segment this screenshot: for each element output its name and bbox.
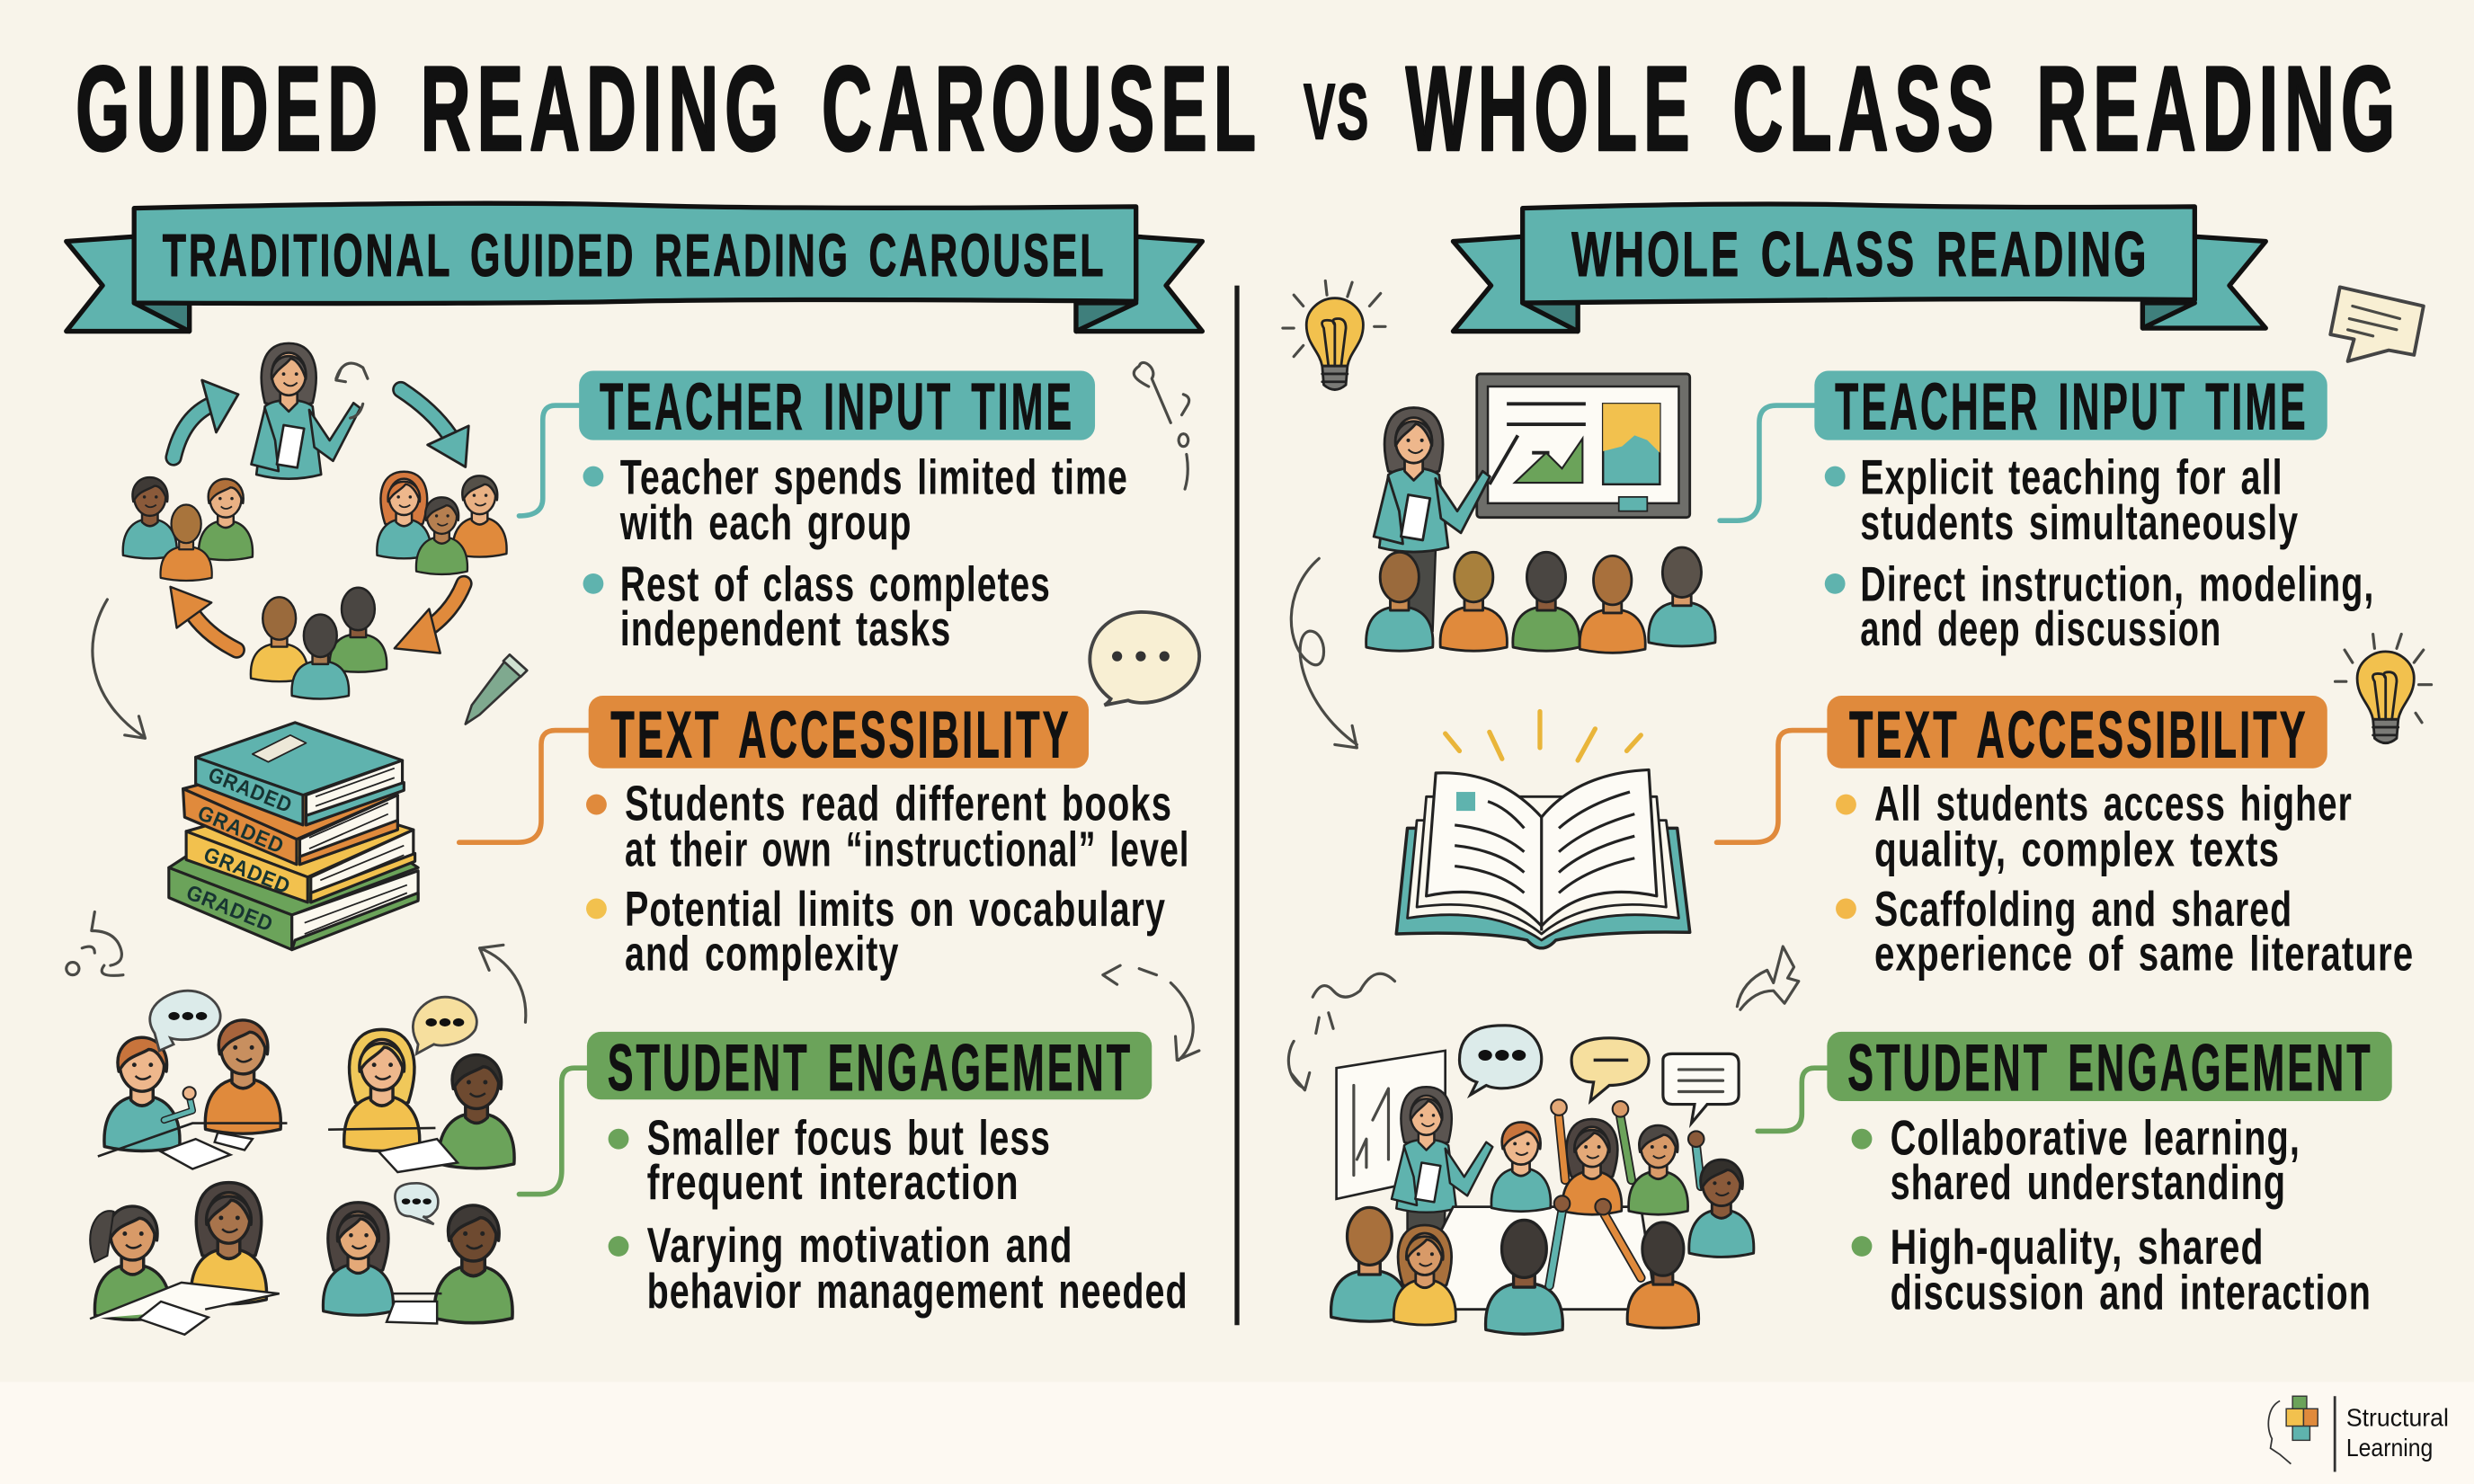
- cover: [1396, 828, 1690, 948]
- bullet list: shared understanding: [1891, 1155, 2286, 1210]
- orange book: GRADED: [194, 802, 288, 859]
- arrow: curved dashed: [1103, 965, 1199, 1060]
- left student group: [123, 477, 253, 581]
- green book: GRADED: [182, 881, 276, 937]
- pair: top left: [98, 991, 287, 1169]
- teacher: [1374, 408, 1517, 631]
- bottom student group: [251, 588, 387, 698]
- whiteboard: [1337, 1051, 1446, 1199]
- arrow: orange up-left: [171, 587, 236, 650]
- yellow book: [186, 796, 415, 902]
- section: student engagement: [1758, 1030, 2392, 1320]
- front row students: [1331, 1195, 1699, 1334]
- table: [1402, 1207, 1657, 1310]
- logo icon: [2268, 1396, 2318, 1464]
- pair: bottom left: [90, 1183, 280, 1335]
- section: teacher input time: [1720, 369, 2374, 656]
- teal book: GRADED: [205, 763, 296, 818]
- seated class seen from behind: [1366, 547, 1715, 653]
- yellow book: GRADED: [200, 843, 294, 899]
- pill heading: STUDENT ENGAGEMENT: [608, 1030, 1133, 1105]
- pair: top right: •••: [424, 1006, 466, 1038]
- title: VS: [1304, 67, 1369, 156]
- title: GUIDED READING CAROUSEL: [76, 42, 1262, 176]
- raised-hand students: [1491, 1099, 1754, 1257]
- logo divider: [2334, 1396, 2336, 1471]
- section: text accessibility: [1717, 696, 2414, 981]
- pair: bottom right: •••: [401, 1189, 432, 1213]
- orange book: [183, 760, 397, 865]
- rays: [1446, 712, 1641, 760]
- bullet list: and complexity: [625, 926, 899, 981]
- illustration: graded book stack: [169, 723, 418, 950]
- pill heading: [587, 1030, 1152, 1105]
- bullet list: Rest of class completes: [620, 557, 1051, 612]
- pages: [1408, 821, 1678, 940]
- illustration: pair work groups: [90, 991, 514, 1335]
- arrow: orange down-left: [395, 583, 464, 653]
- logo wordmark: Learning: [2346, 1434, 2433, 1462]
- banner: whole class reading: WHOLE CLASS READING: [1571, 218, 2149, 289]
- speech bubbles: •••: [1477, 1034, 1527, 1076]
- bullet list: at their own “instructional” level: [625, 822, 1189, 877]
- bullet list: independent tasks: [620, 601, 951, 656]
- icon: note speech bubble: [2330, 287, 2424, 361]
- connector: [1717, 731, 1827, 842]
- teacher: [1392, 1087, 1492, 1247]
- green book: [169, 844, 418, 950]
- bullet list: students simultaneously: [1860, 495, 2299, 550]
- connector: [1758, 1068, 1827, 1131]
- footer band: [0, 1382, 2474, 1484]
- logo wordmark: [2346, 1404, 2449, 1462]
- bullet list: with each group: [619, 495, 912, 550]
- section: student engagement: [519, 1030, 1188, 1319]
- panel: centre divider: [1234, 286, 1240, 1325]
- pill heading: TEXT ACCESSIBILITY: [610, 697, 1072, 771]
- arrow: board to book with loop: [1291, 558, 1357, 748]
- illustration: teacher rotating between groups: [123, 343, 507, 698]
- banner: whole class reading: [1453, 204, 2265, 332]
- bullet list: [1852, 1111, 2372, 1320]
- bullet list: [583, 449, 1128, 656]
- small circular arrows: [336, 363, 368, 418]
- pill heading: TEACHER INPUT TIME: [600, 369, 1074, 443]
- section: text accessibility: [459, 696, 1189, 981]
- connector: [1720, 405, 1814, 520]
- bullet list: and deep discussion: [1860, 601, 2221, 656]
- bullet list: Potential limits on vocabulary: [625, 882, 1166, 937]
- icon: light bulb small: [2336, 635, 2432, 743]
- bullet list: [586, 777, 1189, 981]
- doodle: question squiggle: [1134, 362, 1189, 489]
- bullet list: frequent interaction: [647, 1155, 1019, 1210]
- bullet list: Students read different books: [625, 777, 1172, 831]
- pair: top left: •••: [167, 1000, 209, 1032]
- bullet list: [1825, 449, 2374, 656]
- arrow: pairs to books: [480, 945, 526, 1022]
- arrow: teal up: [174, 380, 238, 458]
- pair: bottom right: [323, 1183, 512, 1324]
- right student group: [377, 472, 507, 574]
- bullet list: Explicit teaching for all: [1860, 449, 2283, 504]
- connector: [519, 405, 579, 516]
- pair: top right: [328, 997, 514, 1172]
- panel: whole class reading: [1283, 204, 2432, 1334]
- bullet list: Teacher spends limited time: [620, 449, 1128, 504]
- panel: traditional guided reading carousel: [67, 203, 1202, 1335]
- teacher: [251, 343, 360, 479]
- whiteboard: [1477, 374, 1690, 518]
- illustration: class discussion: [1331, 1026, 1754, 1334]
- teal book: [196, 723, 404, 825]
- banner: traditional guided reading carousel: [67, 203, 1202, 332]
- bullet list: Scaffolding and shared: [1874, 882, 2292, 937]
- bullet list: Varying motivation and: [647, 1218, 1072, 1273]
- bullet list: Collaborative learning,: [1891, 1111, 2300, 1166]
- icon: pencil: [466, 654, 527, 724]
- logo wordmark: Structural: [2346, 1404, 2449, 1432]
- bullet list: High-quality, shared: [1891, 1220, 2265, 1275]
- speech bubble: ellipsis: [1090, 612, 1199, 706]
- logo: structural learning: [2268, 1396, 2449, 1471]
- doodle: squiggle and arrow: [1288, 973, 1395, 1090]
- section: teacher input time: [519, 369, 1128, 656]
- arrow: teal down: [401, 390, 468, 467]
- pill heading: [579, 369, 1095, 443]
- arrow: carousel to books: [93, 600, 145, 738]
- banner: traditional guided reading carousel: TRADITIONAL GUIDED READING CAROUSEL: [163, 223, 1106, 289]
- bullet list: Smaller focus but less: [647, 1111, 1051, 1166]
- bullet list: [1836, 777, 2414, 981]
- illustration: teacher at whiteboard with class: [1366, 374, 1715, 653]
- connector: [459, 731, 589, 842]
- icon: light bulb: [1283, 280, 1385, 390]
- speech bubbles: [1459, 1026, 1739, 1124]
- doodle: squiggle: [67, 911, 123, 975]
- connector: [519, 1068, 587, 1195]
- doodle: arrows: [1737, 946, 1799, 1009]
- bullet list: quality, complex texts: [1874, 822, 2280, 877]
- bullet list: [609, 1111, 1188, 1319]
- pill heading: [589, 696, 1089, 771]
- bullet list: behavior management needed: [647, 1264, 1188, 1319]
- illustration: open book: [1396, 712, 1690, 948]
